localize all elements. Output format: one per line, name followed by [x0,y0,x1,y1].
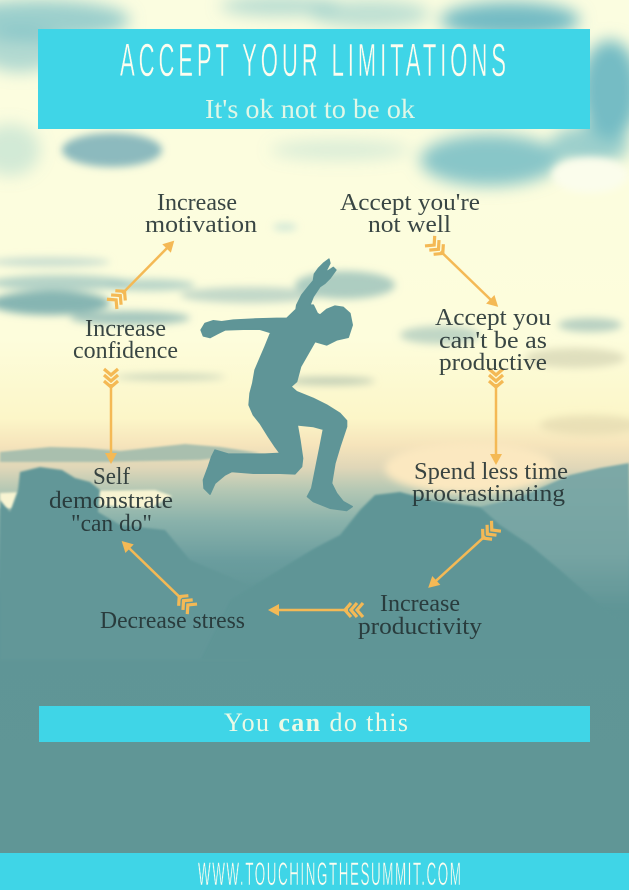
step: accept you're not well: not well [368,212,451,238]
distant hills [0,444,260,462]
step: accept you're not well [340,190,480,238]
step: accept you're not well: Accept you're [340,190,480,216]
step: spend less time procrastinating: procrastinating [412,481,565,507]
subtitle: It's ok not to be ok [205,94,416,124]
step: self demonstrate can do: "can do" [71,511,152,537]
arrow: productive to procrastinating [489,369,503,465]
step: increase productivity: Increase [380,591,460,617]
step: increase motivation: Increase [157,190,237,216]
step: increase confidence [73,316,178,364]
step: self demonstrate can do [49,464,173,537]
step: spend less time procrastinating [412,459,568,507]
step: spend less time procrastinating: Spend less time [414,459,568,485]
step: accept you can't be as productive: Accept you [435,305,551,331]
step: self demonstrate can do: demonstrate [49,488,173,514]
clouds [62,133,162,167]
jumping person silhouette [201,259,352,511]
footer banner: website [0,853,629,890]
step: accept you can't be as productive [435,305,551,376]
middle banner: you can do this: You can do this [224,708,408,737]
step: increase productivity [358,591,482,640]
middle banner: you can do this [39,706,590,742]
step: accept you can't be as productive: can't be as [439,328,547,354]
lake highlight [0,490,172,510]
step: accept you can't be as productive: productive [439,350,547,376]
step: decrease stress: Decrease stress [100,608,245,634]
step: increase confidence: confidence [73,338,178,364]
arrow: confidence to motivation [107,236,179,309]
arrow: procrastinating to productivity [423,521,501,593]
left trees [0,467,260,660]
step: increase motivation [145,190,257,238]
arrow: accept not well to productive [425,236,503,312]
right mountain [480,463,629,610]
step: increase confidence: Increase [85,316,166,342]
arrow: stress to can do [117,536,197,614]
summit rock [200,492,629,660]
step: increase motivation: motivation [145,212,257,238]
top banner [38,29,590,129]
step: self demonstrate can do: Self [93,464,130,490]
title: ACCEPT YOUR LIMITATIONS [120,34,506,86]
arrow: can do to confidence [104,369,118,464]
step: increase productivity: productivity [358,614,482,640]
arrow: productivity to stress [268,603,363,617]
